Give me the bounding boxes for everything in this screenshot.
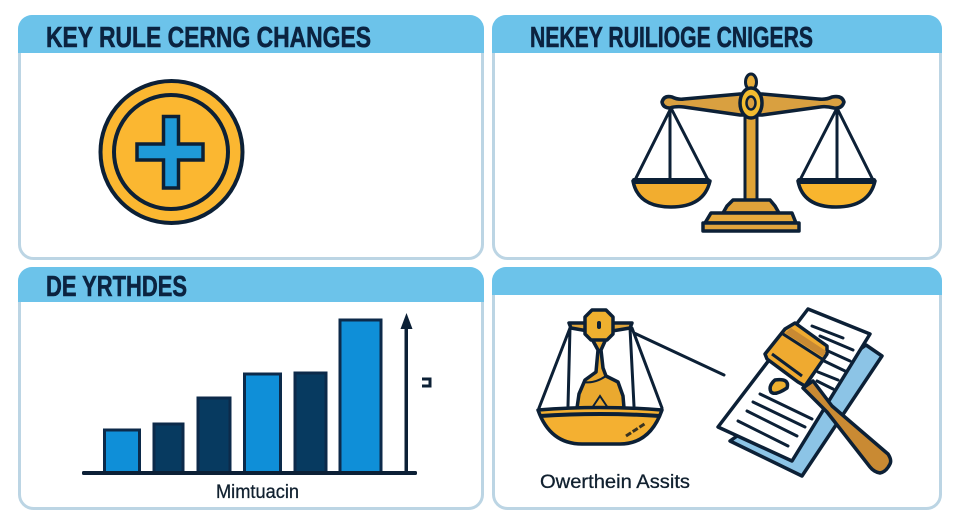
chart label: Mimtuacin <box>216 481 299 503</box>
panel: key rule changes <box>18 15 484 258</box>
header bar: panel 4 <box>492 267 942 295</box>
icon: scale with money bag <box>538 310 724 444</box>
icon: gavel on document <box>718 309 891 476</box>
header bar: panel 1 <box>18 15 484 53</box>
panel: rule changes scales <box>492 15 942 258</box>
bar chart <box>82 313 430 475</box>
axis tick mark <box>422 379 430 386</box>
heading: panel 2: NEKEY RUILIOGE CNIGERS <box>530 22 813 54</box>
header bar: panel 2 <box>492 15 942 53</box>
arrow: vertical axis <box>400 313 412 473</box>
caption: Owerthein Assits <box>540 471 690 493</box>
header bar: panel 3 <box>18 267 484 302</box>
heading: panel 3: DE YRTHDES <box>46 271 187 303</box>
heading: panel 1: KEY RULE CERNG CHANGES <box>46 22 371 54</box>
icon: coin with plus <box>100 81 242 223</box>
panel: bar chart section <box>18 267 484 508</box>
panel: assets and gavel <box>492 267 942 508</box>
icon: balance scales <box>632 74 876 231</box>
